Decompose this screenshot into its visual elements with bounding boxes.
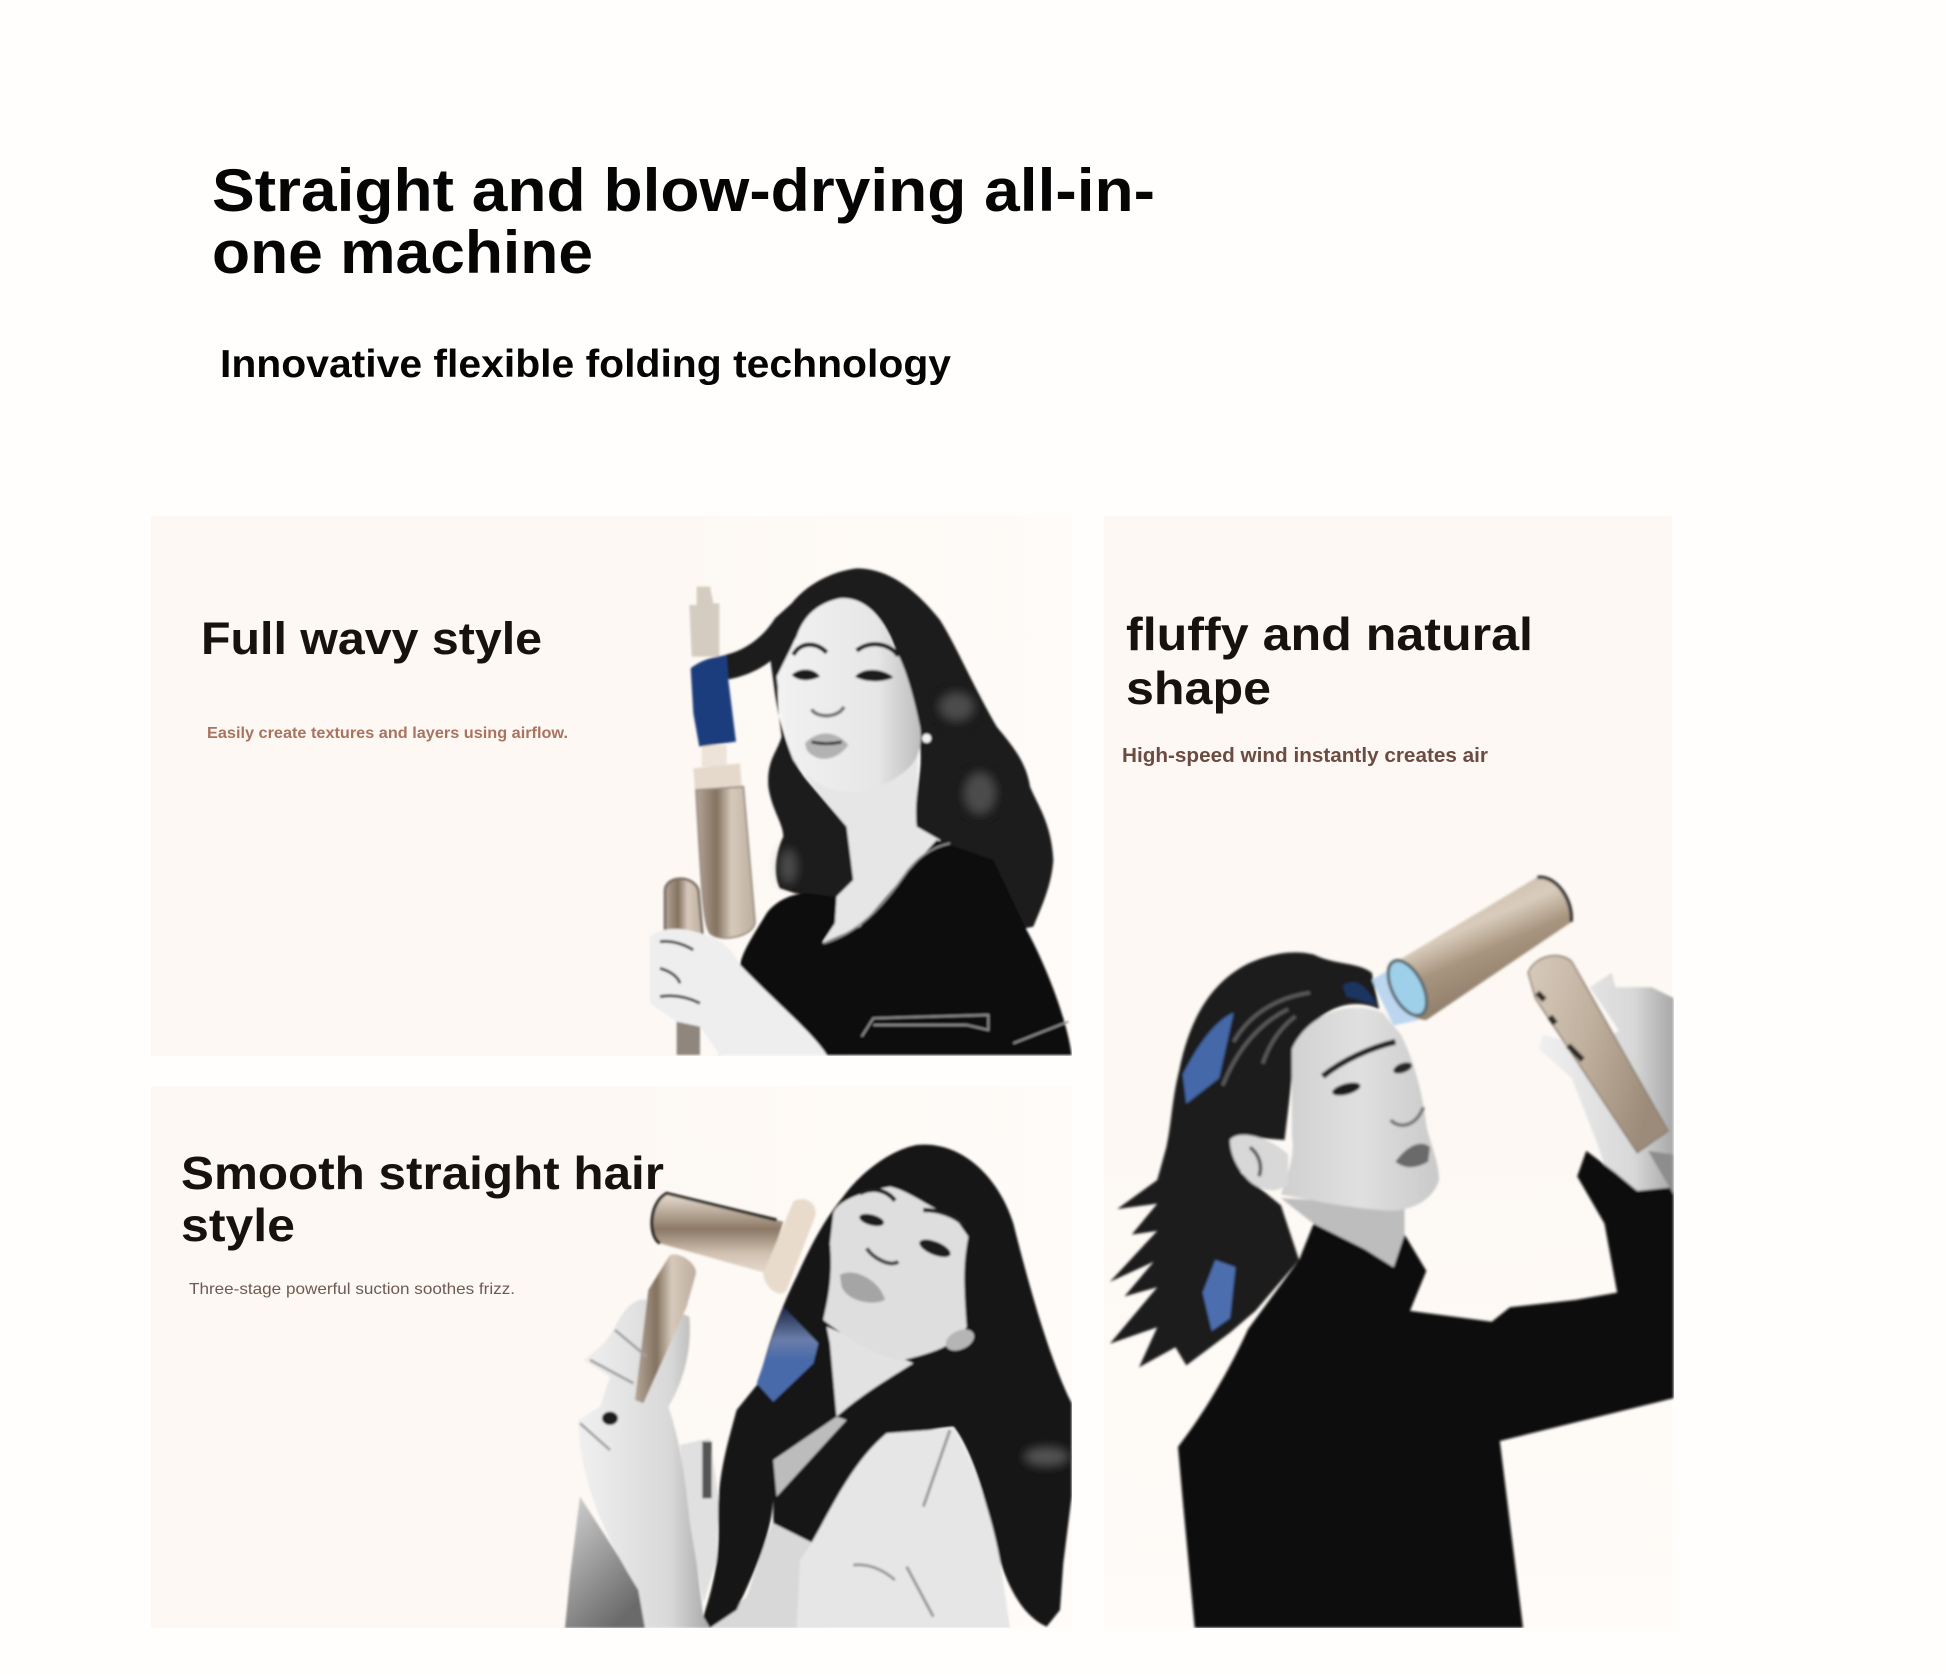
curler neck bbox=[702, 745, 727, 767]
eyes bbox=[1331, 1080, 1362, 1098]
description: High-speed wind instantly creates air bbox=[1122, 745, 1488, 767]
sleeve behind bbox=[680, 1438, 718, 1603]
coat bbox=[1178, 1151, 1674, 1628]
sleeve stripe bbox=[702, 1442, 712, 1498]
ring bbox=[602, 1412, 618, 1425]
panel: smooth straight hair style bbox=[151, 1086, 1072, 1628]
eyebrows bbox=[1323, 1042, 1395, 1076]
hair highlights bbox=[1223, 993, 1310, 1085]
face bbox=[823, 1187, 968, 1360]
hand and forearm bbox=[578, 1299, 710, 1628]
garment folds bbox=[853, 1430, 950, 1617]
description: Easily create textures and layers using airflow. bbox=[207, 725, 568, 742]
collar strip bbox=[773, 1417, 847, 1497]
air stream bbox=[1372, 969, 1419, 1025]
handle slots bbox=[1537, 993, 1583, 1060]
panel background bbox=[1104, 516, 1672, 1628]
light area behind model bbox=[620, 516, 1072, 1056]
cord stub bbox=[1648, 1151, 1674, 1195]
title: one machine bbox=[212, 219, 593, 286]
panel background bbox=[151, 1086, 1072, 1628]
curler barrel bbox=[696, 787, 755, 938]
dryer handle bbox=[1528, 956, 1668, 1153]
curler collar bbox=[693, 763, 742, 791]
eyebrows bbox=[860, 1190, 965, 1225]
title: Straight and blow-drying all-in- bbox=[212, 157, 1155, 224]
dryer barrel bbox=[652, 1193, 783, 1273]
figure: woman with curling wand bbox=[650, 568, 1072, 1055]
hair bbox=[768, 568, 1053, 930]
hair highlight bbox=[1023, 1447, 1070, 1467]
black top bbox=[740, 840, 1072, 1055]
earring bbox=[922, 734, 931, 743]
eyes bbox=[858, 1212, 885, 1228]
eyebrows bbox=[793, 644, 898, 656]
hair lock bbox=[725, 603, 797, 679]
heading: fluffy and natural bbox=[1126, 608, 1533, 660]
curler handle bbox=[665, 879, 703, 937]
nose bbox=[812, 707, 844, 716]
finger gaps bbox=[580, 1330, 647, 1450]
panel background bbox=[151, 516, 1072, 1056]
heading: shape bbox=[1126, 662, 1271, 714]
description: Three-stage powerful suction soothes frizz. bbox=[189, 1281, 515, 1298]
barrel edge bbox=[1537, 877, 1571, 922]
dryer nozzle bbox=[763, 1199, 815, 1293]
panel: full wavy style bbox=[151, 516, 1072, 1056]
panel: fluffy and natural shape bbox=[1104, 516, 1674, 1628]
blue hair streak lower bbox=[1203, 1260, 1235, 1331]
blue hair wrap bbox=[691, 655, 736, 747]
lips bbox=[805, 734, 848, 759]
hair bbox=[1110, 952, 1379, 1367]
lips bbox=[840, 1272, 885, 1303]
figure: man with dryer bbox=[1110, 877, 1674, 1628]
eyes bbox=[792, 670, 820, 680]
ear bbox=[942, 1325, 977, 1355]
hair highlights bbox=[779, 692, 997, 910]
hand behind handle bbox=[1539, 973, 1674, 1191]
inner ear bbox=[1250, 1147, 1260, 1176]
curler prongs bbox=[689, 587, 719, 657]
heading: Smooth straight hair bbox=[181, 1147, 664, 1199]
neck bbox=[827, 1327, 913, 1417]
barrel edge bbox=[652, 1193, 777, 1243]
ear bbox=[1230, 1135, 1288, 1190]
nose bbox=[867, 1248, 898, 1263]
dryer handle bbox=[635, 1254, 696, 1403]
finger lines bbox=[660, 941, 700, 1003]
hair bbox=[703, 1145, 1072, 1628]
heading: Full wavy style bbox=[201, 613, 542, 664]
blue hair streak upper bbox=[1183, 1013, 1234, 1104]
forehead blue tint bbox=[1343, 982, 1377, 1005]
garment lower left bbox=[710, 1520, 815, 1628]
light area behind model bbox=[560, 1086, 1072, 1628]
neck and chest bbox=[803, 740, 940, 945]
subtitle: Innovative flexible folding technology bbox=[220, 343, 951, 386]
forearm shade bbox=[565, 1497, 645, 1628]
neck bbox=[1281, 1198, 1405, 1267]
blue hair streak bbox=[757, 1307, 818, 1402]
mouth bbox=[812, 742, 842, 744]
hand bbox=[650, 929, 827, 1055]
figure: woman with dryer bbox=[565, 1145, 1072, 1628]
face bbox=[1281, 1008, 1439, 1211]
garment bbox=[797, 1428, 1010, 1628]
dryer barrel bbox=[1390, 877, 1572, 1020]
top trim bbox=[823, 843, 1068, 1043]
sliver below hand bbox=[718, 1038, 773, 1055]
nose bbox=[1391, 1107, 1423, 1125]
heading: style bbox=[181, 1199, 295, 1251]
curler rod bbox=[677, 1017, 700, 1055]
face bbox=[777, 598, 921, 792]
dryer lens bbox=[1380, 954, 1435, 1021]
lips bbox=[1395, 1144, 1430, 1167]
